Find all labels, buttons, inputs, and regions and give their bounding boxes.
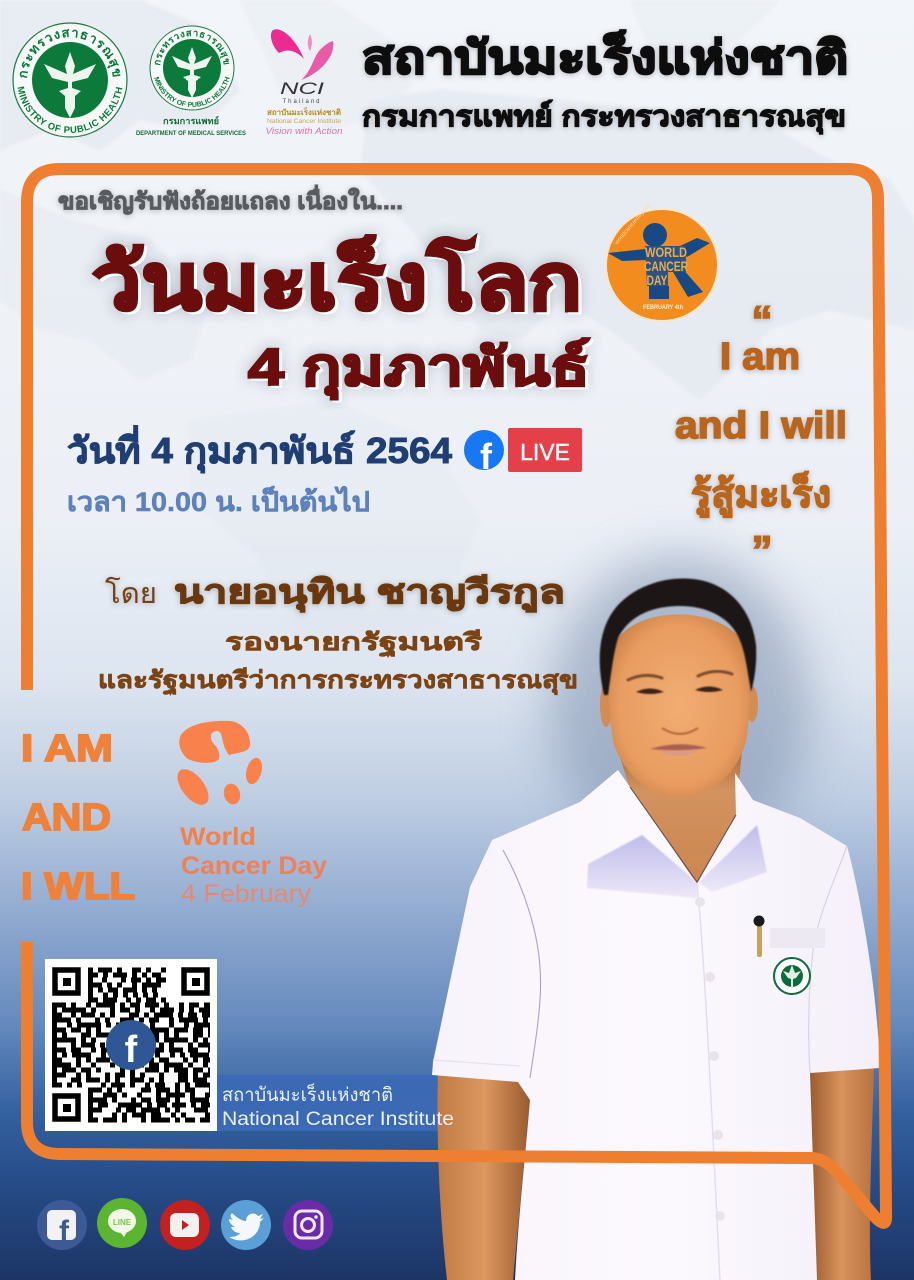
- mouth: [650, 744, 707, 756]
- shirt: [432, 770, 880, 1280]
- speaker name: นายอนุทิน ชาญวีรกูล: [174, 573, 565, 613]
- logo: national cancer institute: Vision with Action: [266, 126, 342, 136]
- nose: [662, 728, 698, 734]
- logo: ministry of public health: MINISTRY OF PUBLIC HEALTH: [18, 86, 122, 133]
- shirt buttons: [695, 897, 725, 1221]
- speaker position: และรัฐมนตรีว่าการกระทรวงสาธารณสุข: [98, 667, 578, 696]
- shirt pen: [754, 916, 764, 957]
- icon: line: [97, 1198, 147, 1248]
- hair: [600, 579, 756, 695]
- header: department name: กรมการแพทย์ กระทรวงสาธารณสุข: [362, 99, 846, 134]
- institute name text: National Cancer Institute: [222, 1109, 454, 1130]
- qr code: f: [125, 1029, 138, 1071]
- date line: วันที่ 4 กุมภาพันธ์ 2564: [67, 425, 452, 474]
- world map backdrop: [0, 0, 914, 660]
- logo: department of medical services: กระทรวงสาธารณสุข: [154, 30, 230, 66]
- icon: youtube: [160, 1200, 210, 1250]
- logo: department of medical services: กรมการแพทย์: [163, 115, 219, 126]
- quote: I am: [720, 336, 800, 378]
- live badge: LIVE: [520, 439, 570, 465]
- icon: twitter: [221, 1200, 271, 1250]
- logo: national cancer institute: NCI: [280, 79, 324, 98]
- icon: line: LINE: [113, 1218, 132, 1227]
- icon: facebook: [464, 430, 504, 477]
- invitation line: ขอเชิญรับฟังถ้อยแถลง เนื่องใน....: [58, 184, 403, 215]
- speech bubble frame: [27, 169, 886, 1223]
- header logos: [12, 22, 342, 138]
- speaker name: [105, 573, 565, 613]
- logo: world cancer day: 4 February: [181, 880, 312, 908]
- speaker name: โดย: [105, 576, 157, 610]
- brows: [628, 671, 732, 680]
- face: [609, 614, 750, 797]
- slogan: i am and i will: AND: [22, 797, 111, 839]
- logo: national cancer institute: National Cancer Institute: [267, 119, 342, 125]
- logo: department of medical services: MINISTRY OF PUBLIC HEALTH: [154, 76, 230, 107]
- logo: national cancer institute: [266, 29, 342, 136]
- badge: world cancer day orange: WORLD: [645, 244, 687, 260]
- logo: national cancer institute: Thailand: [282, 99, 322, 105]
- logo: world cancer day: Cancer Day: [181, 852, 327, 880]
- logo: national cancer institute: สถาบันมะเร็งแห่งชาติ: [267, 106, 341, 117]
- live badge: [508, 428, 582, 472]
- icon: facebook: f: [480, 436, 493, 477]
- logo: department of medical services: DEPARTMENT OF MEDICAL SERVICES: [136, 130, 247, 137]
- ears: [600, 683, 758, 727]
- institute name text: สถาบันมะเร็งแห่งชาติ: [222, 1082, 393, 1106]
- badge: world cancer day orange: worldcancerday.org: [613, 203, 652, 247]
- glow behind presenter: [550, 555, 810, 865]
- icon: instagram: [283, 1200, 333, 1250]
- quote: and I will: [675, 405, 847, 447]
- shirt badge: [774, 958, 810, 994]
- slogan: i am and i will: I WLL: [21, 866, 135, 908]
- qr code: [45, 959, 217, 1131]
- logo: ministry of public health: [12, 22, 128, 138]
- head: [600, 579, 758, 797]
- speaker position: รองนายกรัฐมนตรี: [225, 629, 482, 658]
- social icons: [37, 1198, 333, 1250]
- icon: facebook: f: [59, 1215, 70, 1248]
- band: institute name: [217, 1075, 537, 1131]
- logo: world cancer day: [171, 721, 327, 908]
- logo: ministry of public health: กระทรวงสาธารณสุข: [20, 28, 120, 78]
- badge: world cancer day orange: FEBRUARY 4th: [643, 305, 683, 311]
- speaker position: [98, 629, 578, 696]
- icon: facebook: [37, 1200, 87, 1250]
- quote: รู้สู้มะเร็ง: [691, 471, 831, 518]
- subtitle: 4 february: 4 กุมภาพันธ์: [248, 338, 590, 400]
- time line: เวลา 10.00 น. เป็นต้นไป: [67, 484, 370, 517]
- title: world cancer day: วันมะเร็งโลก: [92, 236, 582, 326]
- quote: ”: [752, 527, 772, 574]
- badge: world cancer day orange: DAY: [646, 272, 668, 288]
- eyes: [636, 686, 723, 694]
- logo: department of medical services: [136, 26, 247, 137]
- badge: world cancer day orange: CANCER: [644, 258, 688, 274]
- badge: world cancer day orange: [605, 203, 719, 322]
- arms: [437, 1068, 874, 1280]
- slogan: i am and i will: I AM: [21, 728, 113, 770]
- header: institute name: สถาบันมะเร็งแห่งชาติ: [362, 30, 848, 83]
- presenter photo: [432, 579, 880, 1280]
- slogan: i am and i will: [21, 728, 135, 908]
- quote: [675, 297, 847, 574]
- logo: world cancer day: World: [180, 823, 256, 851]
- neck: [618, 750, 742, 884]
- institute name text: [222, 1082, 454, 1130]
- quote: “: [752, 297, 772, 344]
